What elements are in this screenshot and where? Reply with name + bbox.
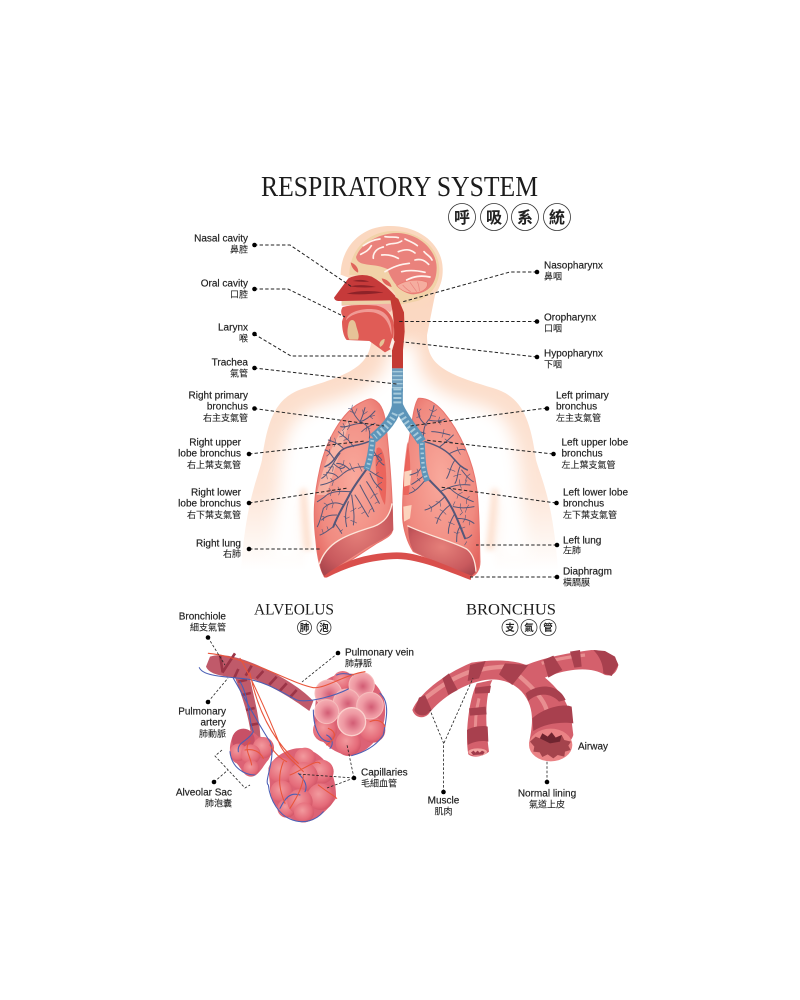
label: normal lining: Normal lining [518, 788, 576, 800]
label: left upper lobe bronchus: bronchus [562, 448, 603, 460]
label: pulmonary artery: Pulmonary [178, 706, 226, 718]
label: pulmonary vein: 肺靜脈 [345, 658, 372, 668]
label: capillaries [298, 745, 408, 788]
label: nasal cavity: 鼻腔 [230, 244, 248, 254]
label: left upper lobe bronchus: Left upper lobe [562, 438, 629, 448]
skin outline of head [341, 226, 443, 313]
label: oral cavity [201, 278, 345, 317]
label: left lower lobe bronchus: bronchus [563, 498, 604, 510]
label: alveolar sac [176, 750, 250, 808]
label: nasal cavity [194, 234, 352, 287]
heading: alveolus: 肺 [300, 622, 310, 634]
skull [349, 231, 439, 305]
alveolar cluster open [313, 671, 385, 756]
pulmonary vein and artery vessels [199, 653, 387, 822]
heading: alveolus [254, 602, 334, 634]
label: nasopharynx [402, 260, 603, 302]
label: normal lining [518, 760, 576, 810]
label: right lower lobe bronchus: Right lower [191, 488, 242, 498]
heading: bronchus: 支 [505, 622, 515, 634]
label: muscle: 肌肉 [434, 806, 453, 816]
label: nasal cavity: Nasal cavity [194, 234, 248, 244]
label: left upper lobe bronchus: 左上葉支氣管 [562, 459, 616, 470]
label: right upper lobe bronchus: lobe bronchus [178, 448, 241, 460]
third branch [467, 680, 492, 757]
label: right upper lobe bronchus: 右上葉支氣管 [187, 459, 241, 470]
label: bronchiole: Bronchiole [179, 612, 226, 622]
tongue bone [347, 320, 359, 340]
label: right lower lobe bronchus: lobe bronchus [178, 498, 241, 510]
label: diaphragm: 橫膈膜 [563, 576, 590, 588]
alveolar sac small [230, 729, 274, 777]
chinese title badges: 呼 [454, 209, 470, 227]
label: right primary bronchus: bronchus [207, 402, 248, 412]
heading: alveolus: 泡 [319, 622, 329, 634]
label: right upper lobe bronchus [178, 438, 365, 470]
label: airway: Airway [578, 742, 608, 752]
body silhouette [241, 290, 558, 580]
label: nasopharynx: Nasopharynx [544, 260, 603, 272]
upper right branch [515, 650, 618, 685]
label: left lung: Left lung [563, 536, 601, 546]
label: left primary bronchus: bronchus [556, 402, 597, 412]
trachea and main bronchi [367, 388, 427, 481]
alveolar sac large [268, 748, 336, 822]
label: oropharynx: Oropharynx [544, 312, 596, 324]
label: muscle: Muscle [428, 796, 460, 806]
heading: bronchus: 管 [543, 622, 553, 634]
title: RESPIRATORY SYSTEM [261, 171, 538, 203]
label: right upper lobe bronchus: Right upper [189, 438, 242, 448]
heading: bronchus [466, 602, 556, 636]
label: larynx [218, 322, 392, 356]
label: bronchiole [179, 612, 226, 665]
turbinates [347, 280, 383, 294]
label: pulmonary artery: artery [200, 718, 226, 728]
oral cavity [341, 305, 394, 352]
label: left lower lobe bronchus: Left lower lobe [563, 488, 628, 498]
label: normal lining: 氣道上皮 [529, 798, 565, 810]
heading: bronchus: BRONCHUS [466, 602, 556, 618]
label: left lower lobe bronchus: 左下葉支氣管 [563, 509, 617, 520]
nasal cavity [334, 275, 397, 301]
muscle bands [414, 650, 618, 745]
label: oropharynx: 口咽 [544, 324, 562, 334]
main tube [412, 660, 573, 752]
label: pulmonary vein [302, 648, 414, 682]
frontal sinus and sphenoid [351, 262, 392, 287]
label: left lower lobe bronchus [440, 487, 628, 520]
lungs [314, 388, 480, 580]
label: hypopharynx: Hypopharynx [544, 348, 603, 360]
label: diaphragm: Diaphragm [563, 566, 612, 578]
bronchial tree right [317, 405, 384, 535]
label: hypopharynx [403, 342, 603, 370]
label: left upper lobe bronchus [425, 438, 629, 470]
bronchial tree left [409, 406, 474, 545]
label: larynx: Larynx [218, 322, 248, 334]
palate [342, 300, 396, 312]
label: oral cavity: Oral cavity [201, 278, 248, 290]
chinese title badges: 系 [517, 208, 533, 227]
left lung [403, 398, 480, 578]
label: right primary bronchus: Right primary [189, 390, 248, 402]
label: right lung: Right lung [196, 538, 241, 550]
label: left lung [476, 536, 601, 556]
label: nasopharynx: 鼻咽 [544, 270, 562, 282]
label: oropharynx [397, 312, 596, 334]
pharynx tube [390, 293, 405, 368]
label: oral cavity: 口腔 [230, 288, 248, 300]
label: pulmonary artery: 肺動脈 [199, 729, 226, 739]
bronchiole tube [206, 655, 313, 742]
label: right primary bronchus: 右主支氣管 [203, 412, 248, 423]
alveolus illustration [199, 653, 387, 822]
heading: bronchus: 氣 [524, 622, 534, 634]
label: left primary bronchus: Left primary [556, 390, 609, 402]
chinese title badges: 統 [549, 208, 565, 227]
brain [356, 233, 437, 294]
label: alveolar sac: Alveolar Sac [176, 788, 232, 798]
label: right lung [196, 538, 320, 559]
label: capillaries: 毛細血管 [361, 778, 397, 788]
label: right lower lobe bronchus [178, 488, 348, 520]
label: pulmonary artery [178, 678, 228, 739]
label: diaphragm [470, 566, 612, 588]
title [261, 171, 570, 230]
label: right lung: 右肺 [223, 548, 241, 559]
label: right lower lobe bronchus: 右下葉支氣管 [187, 509, 241, 520]
chinese title badges [448, 204, 570, 230]
diaphragm [323, 552, 472, 580]
label: trachea: 氣管 [230, 368, 248, 378]
label: left lung: 左肺 [563, 544, 581, 556]
right lung [314, 399, 393, 577]
heading: alveolus: ALVEOLUS [254, 602, 334, 618]
head cross-section [334, 226, 443, 392]
label: left primary bronchus [410, 390, 609, 426]
label: hypopharynx: 下咽 [544, 360, 562, 370]
label: larynx: 喉 [239, 332, 248, 344]
label: bronchiole: 細支氣管 [190, 622, 226, 632]
airway opening [529, 729, 572, 761]
label: muscle [428, 678, 473, 816]
label: pulmonary vein: Pulmonary vein [345, 648, 414, 658]
label: trachea [212, 358, 397, 384]
label: right primary bronchus [189, 390, 384, 426]
chinese title badges: 吸 [486, 209, 502, 227]
label: trachea: Trachea [212, 358, 248, 368]
bronchus illustration [412, 650, 618, 761]
label: left primary bronchus: 左主支氣管 [556, 412, 601, 423]
label: capillaries: Capillaries [361, 768, 408, 778]
label: alveolar sac: 肺泡囊 [205, 798, 232, 808]
